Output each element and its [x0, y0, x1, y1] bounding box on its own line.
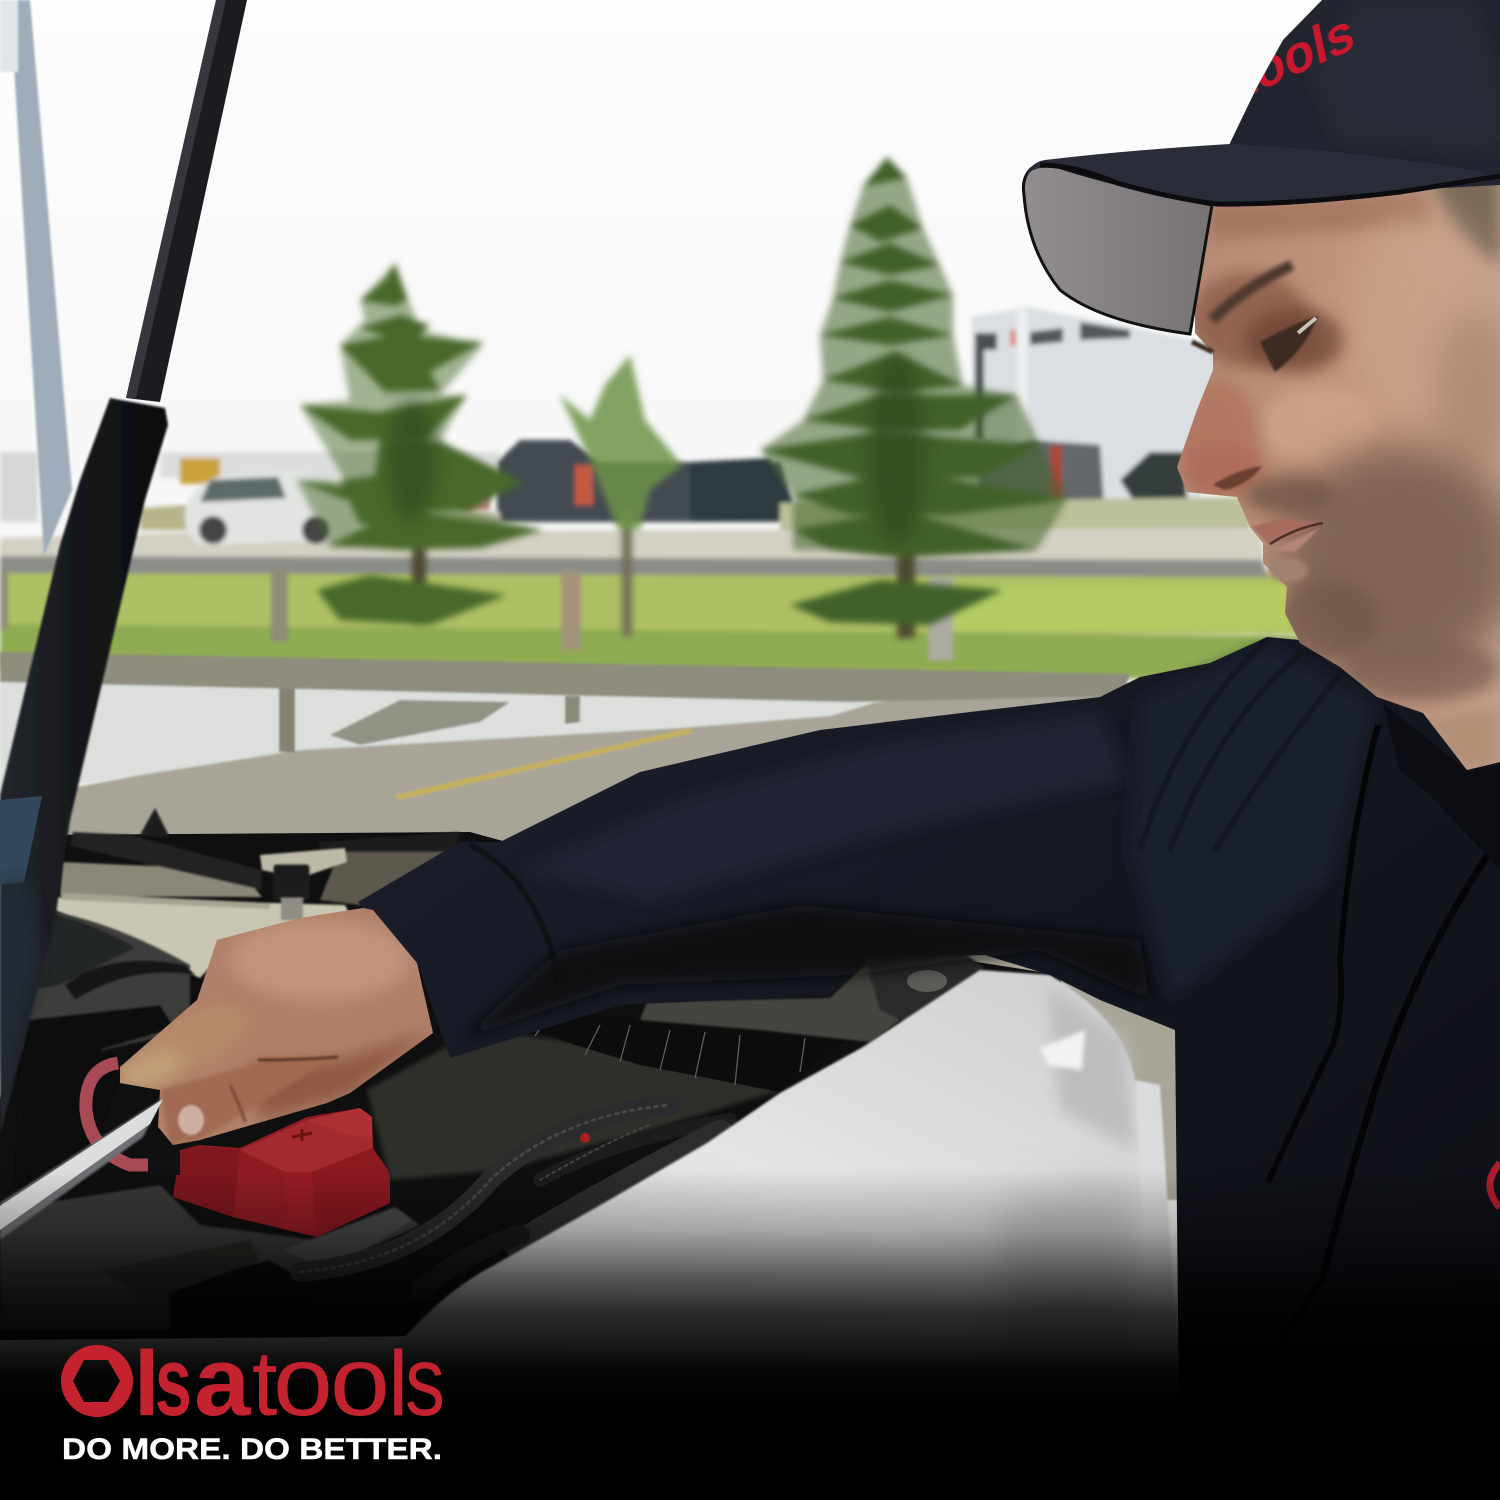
trees [297, 157, 1067, 638]
lower battery tray [0, 1185, 420, 1330]
sleeve underside shadow [460, 905, 1150, 1040]
ribbed vent [500, 1010, 860, 1092]
tree right [760, 157, 1067, 638]
bottom black fade [0, 1170, 1500, 1401]
engine bay [0, 808, 1100, 1340]
eye socket [1245, 308, 1345, 372]
trailers behind fence [0, 440, 1187, 522]
eyelash [1192, 342, 1213, 352]
side stubble [1435, 310, 1500, 470]
tree left [297, 263, 543, 625]
Olsatools logo: s [155, 1327, 192, 1436]
radiator cap [260, 848, 347, 920]
far grass strip [780, 497, 1250, 532]
Olsatools logo: o [330, 1326, 390, 1436]
Olsatools logo [61, 1326, 445, 1437]
mouth line [1270, 523, 1323, 544]
upper cheek light [1335, 206, 1488, 382]
cap brim top [1025, 144, 1500, 203]
stubble [1280, 445, 1500, 675]
grass [0, 572, 1300, 634]
yellow lane line [395, 728, 692, 800]
hair at temple [1428, 185, 1500, 268]
Olsatools logo: l [134, 1333, 160, 1435]
baseball cap [1023, 0, 1500, 334]
cap crown [1215, 0, 1500, 200]
drawstrings [1268, 725, 1378, 1182]
cuff seam [470, 845, 560, 985]
hoodie logo fragment [1490, 1163, 1500, 1208]
ribbed air intake [15, 910, 195, 1190]
mechanic hoodie and sleeve [358, 637, 1500, 1500]
mechanic hand [112, 908, 433, 1145]
hex socket O mark [61, 1345, 133, 1417]
mechanic face [1177, 165, 1500, 770]
nostril [1213, 466, 1262, 490]
Olsatools logo: l [388, 1333, 408, 1435]
building [972, 307, 1220, 500]
lower lip [1272, 528, 1320, 552]
cap brim underside [1023, 162, 1212, 334]
water puddle [0, 672, 900, 790]
red battery terminal cover [146, 1108, 390, 1237]
gas strut [0, 0, 247, 1135]
tagline: DO MORE. DO BETTER. [62, 1433, 442, 1466]
hoodie inner collar [1383, 703, 1500, 870]
white car [185, 470, 370, 545]
Olsatools logo: t [252, 1333, 278, 1435]
red loop cable [86, 1063, 148, 1165]
Olsatools logo: a [194, 1328, 251, 1437]
wrench [0, 1098, 163, 1240]
Olsatools logo: s [405, 1327, 445, 1437]
tree small [560, 355, 682, 636]
pavement, puddle and curb [0, 652, 1180, 1200]
knob bracket [865, 950, 985, 1022]
nose [1178, 380, 1258, 500]
brow shadow [1190, 272, 1310, 368]
road [0, 528, 1265, 565]
eyebrow [1212, 265, 1292, 320]
background scenery [0, 307, 1300, 680]
shoulder folds [1130, 645, 1375, 1000]
eye [1260, 316, 1318, 372]
forehead shadow [1205, 190, 1430, 240]
guard rail [0, 556, 1268, 577]
white fender [370, 970, 1178, 1380]
curb [0, 652, 1130, 702]
trunk shadow cores [388, 355, 925, 545]
cap embroidered logo: tools [1233, 1, 1359, 110]
upper lip [1252, 518, 1322, 545]
Olsatools logo: o [273, 1326, 333, 1436]
wiring loom [300, 1105, 730, 1290]
cream coolant tank [52, 808, 460, 978]
neck [1420, 705, 1500, 770]
sleeve highlight [520, 712, 1130, 900]
chin [1268, 558, 1308, 582]
upper plenum duct [640, 960, 900, 1042]
right side pavement behind fender [1100, 1000, 1180, 1200]
street pole [0, 0, 72, 556]
black engine cover [367, 1030, 780, 1180]
